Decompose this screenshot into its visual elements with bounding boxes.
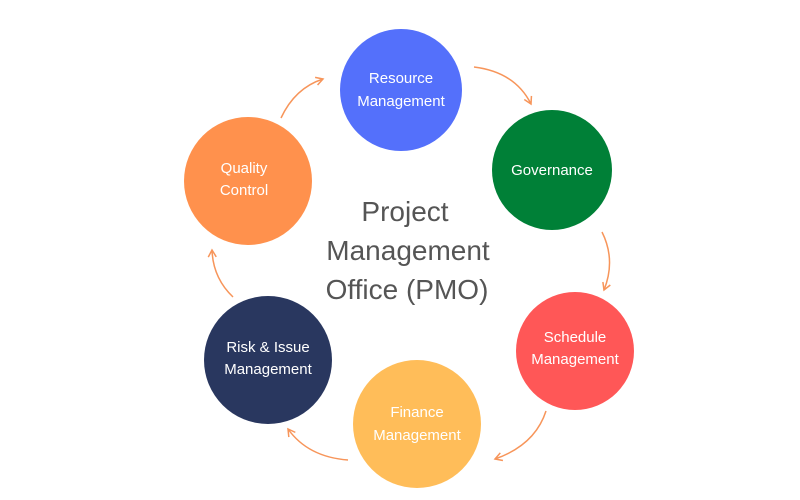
circle: risk & issue management: Management xyxy=(224,361,313,378)
title xyxy=(326,196,490,305)
title: Project xyxy=(361,196,449,227)
circle: schedule management xyxy=(516,292,634,410)
circle: governance xyxy=(492,110,612,230)
circle: resource management: Management xyxy=(357,93,446,110)
circle: governance: Governance xyxy=(511,162,593,179)
arrows xyxy=(212,67,610,460)
circle: finance management: Finance xyxy=(390,404,444,421)
circle: risk & issue management: Risk & Issue xyxy=(226,339,310,356)
circle: resource management: Resource xyxy=(369,70,433,87)
title: Management xyxy=(326,235,490,266)
title: Office (PMO) xyxy=(326,274,488,305)
circle: schedule management: Management xyxy=(531,351,620,368)
circle: quality control: Control xyxy=(220,182,268,199)
circle: schedule management: Schedule xyxy=(544,329,606,346)
circle: finance management xyxy=(353,360,481,488)
circle: finance management: Management xyxy=(373,427,462,444)
circle: quality control xyxy=(184,117,312,245)
circle: quality control: Quality xyxy=(221,160,268,177)
circle: risk & issue management xyxy=(204,296,332,424)
circle: resource management xyxy=(340,29,462,151)
